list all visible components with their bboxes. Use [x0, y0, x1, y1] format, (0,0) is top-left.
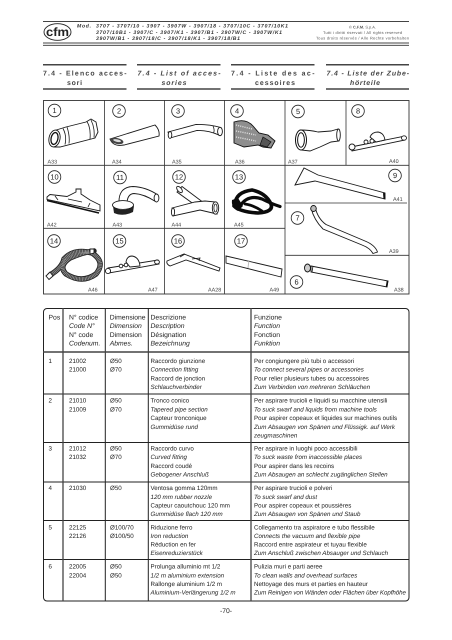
- table row 6: Zum Reinigen von Wänden oder Flächen über Kopfhöhe: [253, 590, 407, 597]
- table row 4: To suck swarf and dust: [254, 494, 317, 501]
- table row 4: Capteur caoutchouc 120 mm: [150, 502, 230, 510]
- part code labels: A39: [389, 249, 399, 255]
- table row 4: Pour aspirer copeaux et poussières: [254, 502, 351, 510]
- table row 1: 1: [48, 358, 52, 365]
- part code labels: A45: [234, 222, 244, 228]
- icon: A46 flexible hose: [46, 249, 100, 280]
- part code labels: A36: [235, 160, 245, 166]
- part code labels: A33: [48, 160, 57, 166]
- table header row: Dimension: [110, 332, 142, 339]
- table row 3: Curved fitting: [150, 454, 188, 461]
- table row 2: [48, 398, 397, 440]
- table row 5: Collegamento tra aspiratore e tubo flessibile: [254, 524, 375, 531]
- table header row: N° code: [69, 332, 93, 339]
- circled number markers: 1: [52, 106, 57, 115]
- icon: A47 nozzle assembly: [105, 256, 159, 274]
- heading: English: 7.4 - List of acces-: [138, 70, 221, 78]
- part code labels: A47: [148, 288, 158, 294]
- table row 2: Ø70: [110, 406, 122, 414]
- table header row: Function: [254, 323, 280, 330]
- model list: Mod.: [77, 24, 91, 30]
- icon: A37 reduction: [296, 129, 340, 151]
- table row 4: Zum Absaugen von Spänen und Staub: [253, 511, 361, 518]
- icon: A38 straight tube: [304, 264, 388, 287]
- icon: A35 curved fitting: [168, 124, 222, 138]
- page number: -70-: [220, 608, 232, 615]
- model list: 3707/10B1 - 3907/C - 3907/K1 - 3907/B1 - 3907W/C - 3907W/K1: [96, 30, 282, 36]
- table header row: Désignation: [150, 332, 187, 339]
- table row 6: 1/2 m aluminium extension: [150, 572, 225, 580]
- circled number markers: 13: [235, 173, 243, 182]
- table row 6: Prolunga alluminio mt 1/2: [150, 564, 221, 571]
- icon: AA28 crevice tube: [167, 254, 220, 271]
- circled number markers: 3: [176, 107, 180, 116]
- table row 2: 21010: [69, 398, 87, 404]
- table row 2: Tronco conico: [150, 398, 190, 404]
- copyright notice: [316, 24, 409, 40]
- table row 5: Ø100/50: [110, 533, 134, 540]
- part code labels: A42: [47, 222, 57, 228]
- table header row: Fonction: [254, 332, 280, 339]
- table row 1: Raccord de jonction: [150, 376, 206, 382]
- circled number markers: 9: [393, 171, 397, 180]
- part code labels: A44: [172, 222, 181, 228]
- circled number markers: 12: [175, 173, 183, 182]
- table header row: Funzione: [254, 314, 282, 322]
- table row 1: 21002: [69, 358, 87, 365]
- table row 1: Pour relier plusieurs tubes ou accessoires: [254, 376, 369, 382]
- table header row: Code N°: [69, 323, 95, 330]
- icon: A43 brush with tube: [112, 186, 159, 215]
- table row 1: Schlauchverbinder: [150, 384, 203, 391]
- table row 1: [48, 358, 371, 391]
- table row 1: Raccordo giunzione: [150, 358, 206, 365]
- table row 3: 3: [48, 446, 52, 452]
- table header row: [48, 314, 282, 348]
- table header row: N° codice: [69, 314, 98, 322]
- table row 3: Ø50: [110, 446, 122, 452]
- heading: French: 7.4 - Liste des ac-: [231, 70, 315, 78]
- circled number markers: [48, 104, 401, 288]
- copyright notice: © C.F.M. S.p.A.: [349, 24, 376, 30]
- logo: cfm: cfm: [46, 25, 69, 39]
- table row 2: 21009: [69, 406, 87, 414]
- table row 3: Ø70: [110, 454, 122, 461]
- table row 3: Zum Absaugen an schlecht zugänglichen Stellen: [253, 472, 388, 478]
- table row 5: 22126: [69, 533, 87, 540]
- icon: A42 floor tool: [47, 189, 100, 213]
- table row 4: 21030: [69, 485, 87, 492]
- table row 2: Tapered pipe section: [150, 406, 208, 414]
- circled number markers: 10: [50, 173, 59, 182]
- heading: German: [326, 65, 410, 89]
- logo: cfm: [44, 24, 71, 40]
- heading: Italian: sori: [67, 80, 82, 87]
- heading: German: 7.4 - Liste der Zube-: [326, 70, 410, 78]
- icon: A40 nozzle assembly: [349, 132, 406, 151]
- table row 1: Ø70: [110, 366, 122, 374]
- part code labels: A37: [288, 160, 298, 166]
- icon: A45 black hose: [232, 190, 280, 213]
- table header row: Descrizione: [150, 314, 186, 322]
- circled number markers: 8: [356, 107, 360, 116]
- table row 5: Connects the vacuum and flexible pipe: [254, 533, 361, 540]
- circled number markers: 2: [117, 107, 121, 116]
- table row 4: Per aspirare trucioli e polveri: [254, 485, 332, 492]
- circled number markers: 4: [235, 107, 239, 116]
- table row 6: 22005: [69, 564, 87, 571]
- table row 2: Ø50: [110, 398, 122, 404]
- heading: Italian: 7.4 - Elenco acces-: [43, 70, 127, 78]
- table row 2: Per aspirare trucioli e liquidi su macchine utensili: [254, 398, 387, 404]
- table header row: Description: [150, 323, 185, 330]
- parts table: [43, 308, 409, 601]
- heading: German: hörteile: [350, 80, 380, 87]
- table row 1: Per congiungere più tubi o accessori: [254, 358, 354, 365]
- table row 3: Gebogener Anschluß: [150, 472, 209, 478]
- table row 1: To connect several pipes or accessories: [254, 366, 364, 374]
- circled number markers: 15: [115, 237, 124, 246]
- table row 1: Ø50: [110, 358, 122, 365]
- table row 3: Per aspirare in luoghi poco accessibili: [254, 446, 358, 452]
- table row 4: [48, 485, 361, 518]
- table row 2: Pour aspirer copeaux et liquides sur machines outils: [254, 415, 397, 422]
- accessories grid: [43, 100, 409, 294]
- table header row: Dimensione: [110, 314, 146, 322]
- part code labels: A49: [270, 288, 279, 294]
- part code labels: [47, 159, 404, 294]
- table row 4: Ventosa gomma 120mm: [150, 485, 218, 492]
- part code labels: AA28: [208, 288, 221, 294]
- table header row: Bezeichnung: [150, 340, 190, 348]
- copyright notice: Tous droits réservés / Alle Rechte vorbehalten: [316, 36, 409, 40]
- table row 2: zeugmaschinen: [253, 432, 298, 440]
- table row 3: Raccordo curvo: [150, 446, 194, 452]
- table row 5: Iron reduction: [150, 533, 189, 540]
- table row 3: 21012: [69, 446, 87, 452]
- part code labels: A41: [393, 197, 403, 203]
- table row 2: Zum Absaugen von Spänen und Flüssigk. auf Werk: [253, 424, 396, 431]
- table row 6: 22004: [69, 572, 87, 580]
- model list: 3907W/B1 - 3907/18/C - 3907/18/K1 - 3907/18/B1: [96, 36, 240, 42]
- icon: A33 connection fitting: [47, 119, 98, 148]
- icon: A41 wedge nozzle: [295, 168, 385, 199]
- part code labels: A46: [88, 288, 98, 294]
- table row 1: Connection fitting: [150, 366, 199, 374]
- table row 6: 6: [48, 564, 52, 571]
- heading: French: cessoires: [255, 80, 295, 87]
- copyright notice: Tutti i diritti riservati / All rights reserved: [323, 30, 402, 35]
- table row 6: Rallonge aluminium 1/2 m: [150, 581, 222, 588]
- table row 4: Ø50: [110, 485, 122, 492]
- heading: English: sories: [162, 80, 187, 87]
- table row 6: Nettoyage des murs et parties en hauteur: [254, 581, 368, 588]
- table row 6: Pulizia muri e parti aeree: [254, 564, 323, 571]
- table row 2: Capteur tronconique: [150, 415, 207, 422]
- table header row: Pos: [48, 314, 61, 322]
- table row 3: Pour aspirer dans les recoins: [254, 463, 334, 470]
- table row 6: Ø50: [110, 572, 122, 580]
- part code labels: A38: [394, 288, 404, 294]
- table row 5: Riduzione ferro: [150, 524, 193, 531]
- table row 2: Gummidüse rund: [150, 424, 199, 431]
- icon: A39 bent tube: [311, 206, 378, 254]
- part code labels: A40: [389, 159, 399, 165]
- part code labels: A43: [112, 222, 122, 228]
- table row 1: Zum Verbinden von mehreren Schläuchen: [253, 384, 371, 391]
- table row 3: [48, 446, 388, 478]
- table row 5: Ø100/70: [110, 524, 134, 531]
- table header row: Abmes.: [109, 340, 133, 348]
- icon: A49 extension tube: [226, 256, 282, 277]
- icon: A34 tapered pipe: [110, 125, 159, 145]
- table row 3: To suck waste from inaccessible places: [254, 454, 362, 461]
- part code labels: A34: [112, 160, 122, 166]
- table row 6: [48, 564, 407, 597]
- circled number markers: 5: [296, 107, 300, 116]
- table row 5: 5: [48, 524, 52, 531]
- table row 5: Raccord entre aspirateur et tuyau flexible: [254, 542, 367, 548]
- table row 5: 22125: [69, 524, 87, 531]
- table row 6: Ø50: [110, 564, 122, 571]
- table row 5: Réduction en fer: [150, 542, 196, 548]
- part code labels: A35: [172, 160, 182, 166]
- table row 4: 4: [48, 485, 52, 492]
- icon: A44 Y connector: [171, 185, 219, 216]
- header band: [43, 22, 409, 45]
- table row 5: Eisenreduzierstück: [150, 550, 204, 557]
- table row 1: 21000: [69, 366, 87, 374]
- table row 5: Zum Anschluß zwischen Absauger und Schlauch: [253, 550, 389, 557]
- model list: [77, 24, 288, 42]
- circled number markers: 7: [295, 214, 300, 223]
- heading: French: [231, 65, 315, 89]
- table row 6: Aluminium-Verlängerung 1/2 m: [150, 590, 236, 597]
- table header row: Funktion: [254, 340, 280, 348]
- table row 5: [48, 524, 389, 557]
- table header row: Codenum.: [69, 340, 100, 348]
- heading: Italian: [43, 65, 127, 89]
- table header row: Dimension: [110, 323, 142, 330]
- table row 2: To suck swarf and liquids from machine tools: [254, 406, 377, 414]
- model list: 3707 - 3707/10 - 3907 - 3907W - 3907/18 - 3707/10C - 3707/10K1: [96, 24, 288, 30]
- table row 2: 2: [48, 398, 52, 404]
- table row 3: Raccord coudé: [150, 463, 193, 470]
- circled number markers: 17: [237, 237, 245, 246]
- table row 6: To clean walls and overhead surfaces: [254, 572, 357, 580]
- circled number markers: 6: [294, 278, 299, 287]
- circled number markers: 11: [116, 173, 124, 182]
- icon: A36 rubber nozzle: [234, 121, 275, 148]
- circled number markers: 16: [174, 237, 182, 246]
- circled number markers: 14: [50, 237, 58, 246]
- table row 3: 21032: [69, 454, 87, 461]
- heading: English: [137, 65, 221, 89]
- table row 4: 120 mm rubber nozzle: [150, 494, 213, 501]
- table row 4: Gummidüse flach 120 mm: [150, 511, 223, 518]
